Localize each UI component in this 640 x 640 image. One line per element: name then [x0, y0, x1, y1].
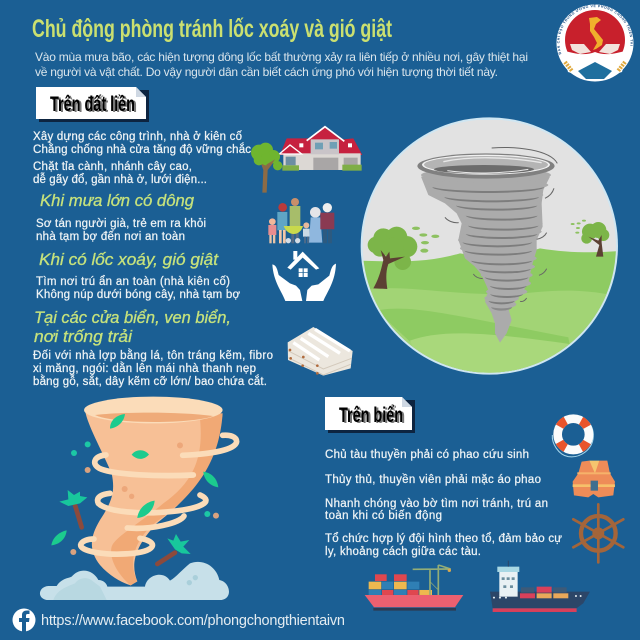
text block: land advice: Xây dựng các công trình, nhà ở kiên cố: [33, 131, 243, 143]
icon: ship wheel: [573, 504, 623, 562]
text block: sea advice: Thủy thủ, thuyền viên phải mặc áo phao: [325, 474, 541, 486]
logo: BAN CHỈ ĐẠO TRUNG ƯƠNG VỀ PHÒNG CHỐNG THIÊN TAI: [557, 4, 633, 55]
illustration: tornado in circle: [360, 117, 620, 377]
text block: land advice: dễ gãy đổ, gần nhà ở, lưới điện...: [33, 173, 207, 186]
heading: heavy rain: Khi mưa lớn có dông: [40, 191, 195, 210]
text block: coast: Đối với nhà lợp bằng lá, tôn tráng kẽm, fibro: [33, 349, 273, 362]
icon: cargo ship: [490, 561, 590, 612]
text block: sea advice: Chủ tàu thuyền phải có phao cứu sinh: [325, 449, 529, 461]
icon: container ship: [365, 565, 463, 611]
icon: timber stack: [288, 327, 353, 376]
text block: coast: xi măng, ngói: dằn lên mái nhà thanh nẹp: [33, 362, 256, 375]
badge: on land: Trên đất liền: [50, 93, 135, 116]
icon: life vest: [573, 461, 615, 497]
text block: sea advice: Nhanh chóng vào bờ tìm nơi tránh, trú an: [325, 498, 548, 510]
tornado funnel: [417, 148, 557, 343]
badge: on land: Trên đất liền: [52, 94, 137, 117]
badge: at sea: [325, 397, 415, 433]
text block: heavy rain: Sơ tán người già, trẻ em ra khỏi: [36, 218, 206, 230]
badge: on land: [36, 87, 149, 122]
text block: coast: [33, 349, 273, 388]
icon: family: [268, 198, 334, 243]
heading: coast: Tại các cửa biển, ven biển,: [34, 308, 231, 327]
icon: hands protecting house: [272, 251, 336, 301]
title: Chủ động phòng tránh lốc xoáy và gió giật: [32, 15, 392, 43]
text block: heavy rain: [36, 218, 206, 243]
text block: sea advice: ly, khoảng cách giữa các tàu.: [325, 546, 481, 558]
tree: right: [571, 220, 609, 257]
text block: sea advice: toàn khi có biến động: [325, 510, 442, 522]
intro text: Vào mùa mưa bão, các hiện tượng dông lốc bất thường xảy ra liên tiếp ở nhiều nơi, gây thiệt hại: [35, 50, 528, 64]
leaves and debris: [51, 414, 218, 545]
facebook link: [12, 608, 345, 632]
tree: left: [368, 227, 439, 289]
wind rings: [81, 435, 237, 554]
text block: coast: bằng gỗ, sắt, dây kẽm cỡ lớn/ bao chứa cắt.: [33, 375, 267, 388]
intro text: [35, 50, 528, 79]
badge: at sea: Trên biển: [339, 404, 403, 427]
logo: [556, 4, 634, 82]
heading: coast: nơi trống trải: [34, 327, 133, 346]
text block: sea advice: Tổ chức hợp lý đội hình theo tổ, đảm bảo cự: [325, 533, 562, 545]
icon: lifebuoy: [552, 416, 593, 457]
text block: land advice: Chằng chống nhà cửa tăng độ vững chắc: [33, 143, 251, 156]
intro text: về người và vật chất. Do vậy người dân cần biết cách ứng phó với hiện tượng thời tiết này.: [35, 65, 498, 79]
text block: tornado: Tìm nơi trú ẩn an toàn (nhà kiên cố): [36, 276, 230, 288]
heading: tornado: Khi có lốc xoáy, gió giật: [39, 250, 219, 269]
illustration: orange tornado: [40, 397, 237, 600]
heading: coast: [34, 308, 231, 346]
icon: tree and house: [251, 127, 362, 193]
text block: land advice: Chặt tỉa cành, nhánh cây cao,: [33, 161, 192, 173]
clouds: [40, 562, 229, 600]
text block: land advice: [33, 131, 251, 186]
facebook link: https://www.facebook.com/phongchongthientaivn: [41, 613, 345, 629]
text block: sea advice: [325, 449, 562, 558]
palm trees: [59, 490, 191, 564]
text block: tornado: [36, 276, 240, 301]
text block: tornado: Không núp dưới bóng cây, nhà tạm bợ: [36, 289, 240, 301]
badge: at sea: Trên biển: [341, 405, 405, 428]
text block: heavy rain: nhà tạm bợ đến nơi an toàn: [36, 231, 185, 243]
